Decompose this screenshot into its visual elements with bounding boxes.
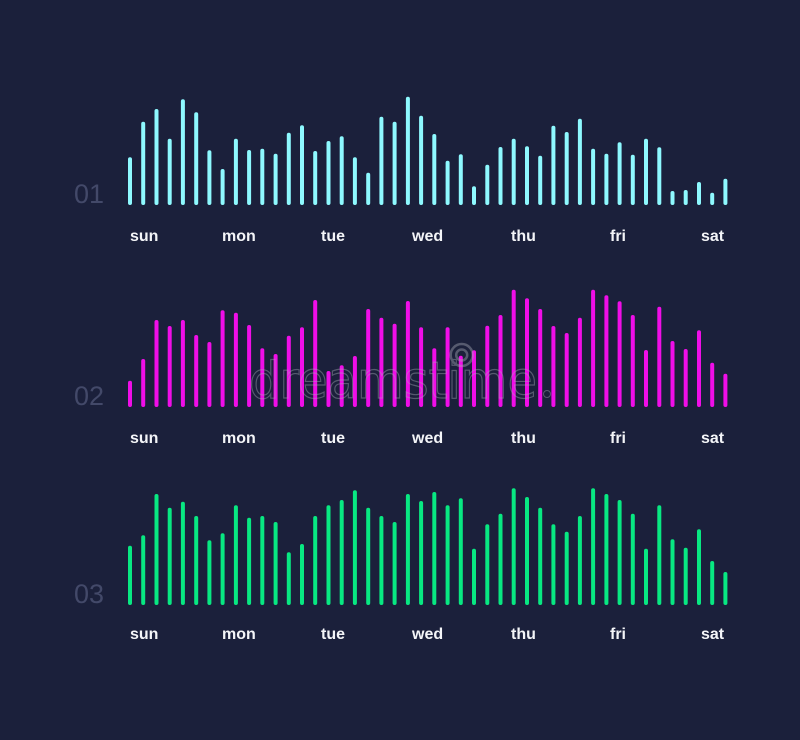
- day labels: wed: [411, 228, 443, 245]
- day labels: mon: [222, 228, 256, 245]
- panel: chart 01: [74, 99, 725, 245]
- day labels: fri: [610, 430, 626, 447]
- bar chart: green bars: [130, 490, 725, 603]
- day labels: thu: [511, 430, 536, 447]
- watermark registered mark: [544, 390, 550, 398]
- day labels: [130, 626, 725, 643]
- day labels: sun: [130, 228, 158, 245]
- day labels: wed: [411, 626, 443, 643]
- day labels: mon: [222, 626, 256, 643]
- day labels: tue: [321, 430, 345, 447]
- day labels: [130, 430, 725, 447]
- watermark: [249, 344, 550, 411]
- watermark text: dreamstime: [249, 352, 537, 411]
- panel: chart 02: [74, 292, 725, 447]
- day labels: thu: [511, 228, 536, 245]
- bar chart: cyan bars: [130, 99, 725, 203]
- day labels: sat: [701, 626, 725, 643]
- day labels: mon: [222, 430, 256, 447]
- day labels: tue: [321, 626, 345, 643]
- watermark icon: spiral: [451, 344, 473, 366]
- day labels: tue: [321, 228, 345, 245]
- row number 02: 02: [74, 381, 104, 411]
- day labels: sun: [130, 430, 158, 447]
- day labels: fri: [610, 626, 626, 643]
- day labels: sun: [130, 626, 158, 643]
- day labels: wed: [411, 430, 443, 447]
- row number 01: 01: [74, 179, 104, 209]
- row number 03: 03: [74, 579, 104, 609]
- day labels: fri: [610, 228, 626, 245]
- bar chart: magenta bars: [130, 292, 725, 405]
- day labels: sat: [701, 430, 725, 447]
- day labels: sat: [701, 228, 725, 245]
- day labels: [130, 228, 725, 245]
- day labels: thu: [511, 626, 536, 643]
- panel: chart 03: [74, 490, 725, 643]
